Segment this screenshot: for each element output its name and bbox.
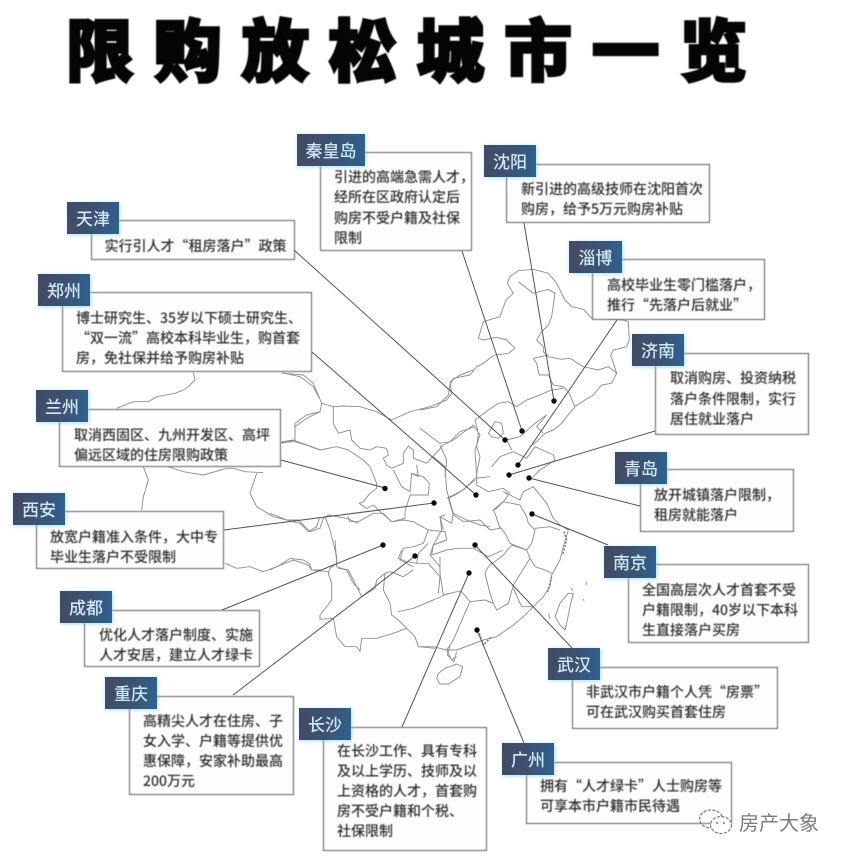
city tag xyxy=(105,677,157,709)
policy text: 租房就能落户 xyxy=(654,505,738,525)
city tag: 成都 xyxy=(69,594,103,619)
policy text xyxy=(90,220,294,260)
city tag xyxy=(60,591,112,623)
policy text: 高精尖人才在住房、子 xyxy=(143,711,283,731)
city tag xyxy=(632,334,684,366)
policy text: 放开城镇落户限制， xyxy=(654,485,780,505)
policy text: 生直接落户买房 xyxy=(642,620,740,640)
callout: 成都 xyxy=(58,589,261,668)
callout: 南京 xyxy=(602,544,810,644)
callout: 西安 xyxy=(11,491,225,570)
callout: 沈阳 xyxy=(482,143,711,224)
policy text xyxy=(320,152,472,251)
policy text: 购房，给予5万元购房补贴 xyxy=(521,199,683,219)
callout: 兰州 xyxy=(34,388,282,468)
policy text: 在长沙工作、具有专科 xyxy=(337,741,477,761)
policy text: 实行引人才“租房落户”政策 xyxy=(104,236,286,256)
policy text: 全国高层次人才首套不受 xyxy=(642,580,796,600)
city tag xyxy=(297,134,365,166)
city tag: 兰州 xyxy=(45,393,79,418)
city tag: 长沙 xyxy=(308,711,342,736)
city tag xyxy=(548,648,600,680)
policy text xyxy=(628,564,809,643)
city tag: 广州 xyxy=(511,746,545,771)
policy text: 惠保障，安家补助最高 xyxy=(143,751,283,771)
policy text: 上资格的人才，首套购 xyxy=(337,781,477,801)
callout: 天津 xyxy=(65,200,296,261)
policy text: 可在武汉购买首套住房 xyxy=(586,702,726,722)
callout: 长沙 xyxy=(297,706,488,852)
policy text xyxy=(526,762,732,824)
callout: 广州 xyxy=(500,741,733,825)
city tag: 秦皇岛 xyxy=(306,137,356,162)
policy text xyxy=(84,610,260,667)
watermark text: 房产大象 xyxy=(739,807,819,836)
policy text: 偏远区域的住房限购政策 xyxy=(74,445,228,465)
city tag xyxy=(615,452,667,484)
city tag xyxy=(38,274,90,306)
city tag xyxy=(484,145,536,177)
policy text xyxy=(592,259,765,320)
city tag xyxy=(502,743,554,775)
policy text: 毕业生落户不受限制 xyxy=(50,547,176,567)
policy text xyxy=(36,511,224,569)
policy text: 社保限制 xyxy=(337,821,393,841)
policy text: 女入学、户籍等提供优 xyxy=(143,731,283,751)
callout: 青岛 xyxy=(613,450,795,533)
policy text: 引进的高端急需人才， xyxy=(334,167,474,187)
callout: 淄博 xyxy=(567,239,766,321)
policy text: 取消购房、投资纳税 xyxy=(670,368,796,388)
policy text xyxy=(572,667,778,729)
city tag: 淄博 xyxy=(578,244,612,269)
policy text xyxy=(129,696,294,795)
city tag: 重庆 xyxy=(114,680,148,705)
policy text xyxy=(506,164,710,223)
policy text: 户籍限制，40岁以下本科 xyxy=(642,600,798,620)
callout: 武汉 xyxy=(546,646,779,730)
policy text: 拥有“人才绿卡”人士购房等 xyxy=(540,776,722,796)
policy text: 购房不受户籍及社保 xyxy=(334,208,460,228)
city tag: 武汉 xyxy=(557,651,591,676)
policy text xyxy=(655,353,809,435)
city tag: 郑州 xyxy=(47,277,81,302)
policy text: 房不受户籍和个税、 xyxy=(337,801,463,821)
policy text: 放宽户籍准入条件，大中专 xyxy=(50,527,218,547)
policy text: 博士研究生、35岁以下硕士研究生、 xyxy=(76,308,302,328)
city tag xyxy=(299,708,351,740)
policy text: 优化人才落户制度、实施 xyxy=(99,625,253,645)
policy text: 取消西固区、九州开发区、高坪 xyxy=(74,425,270,445)
policy text: “双一流”高校本科毕业生，购首套 xyxy=(76,328,300,348)
policy text: 限制 xyxy=(334,228,362,248)
policy text: 落户条件限制，实行 xyxy=(670,388,796,408)
city tag: 济南 xyxy=(641,337,675,362)
policy text: 居住就业落户 xyxy=(670,409,754,429)
callout: 郑州 xyxy=(36,272,313,373)
policy text: 人才安居，建立人才绿卡 xyxy=(99,645,253,665)
city tag: 沈阳 xyxy=(493,148,527,173)
policy text: 房，免社保并给予购房补贴 xyxy=(76,348,244,368)
city tag xyxy=(13,493,65,525)
policy text: 及以上学历、技师及以 xyxy=(337,761,477,781)
icon: wechat watermark xyxy=(698,809,732,834)
policy text xyxy=(640,469,794,532)
policy text xyxy=(59,409,281,467)
policy text: 推行“先落户后就业” xyxy=(607,295,747,315)
city tag xyxy=(67,202,119,234)
callout: 秦皇岛 xyxy=(295,132,474,252)
policy text: 经所在区政府认定后 xyxy=(334,187,460,207)
policy text xyxy=(323,727,487,851)
callout: 济南 xyxy=(630,332,810,436)
city tag xyxy=(569,241,622,273)
city tag xyxy=(36,390,88,422)
policy text: 高校毕业生零门槛落户， xyxy=(607,275,761,295)
policy text: 200万元 xyxy=(143,771,195,791)
callout: 重庆 xyxy=(103,675,295,796)
policy text: 可享本市户籍市民待遇 xyxy=(540,796,680,816)
city tag: 青岛 xyxy=(624,455,658,480)
policy text xyxy=(62,292,312,372)
city tag: 天津 xyxy=(76,205,110,230)
policy text: 非武汉市户籍个人凭“房票” xyxy=(586,682,768,702)
city tag xyxy=(604,546,656,578)
city tag: 南京 xyxy=(613,549,647,574)
city tag: 西安 xyxy=(22,496,56,521)
policy text: 新引进的高级技师在沈阳首次 xyxy=(521,179,703,199)
